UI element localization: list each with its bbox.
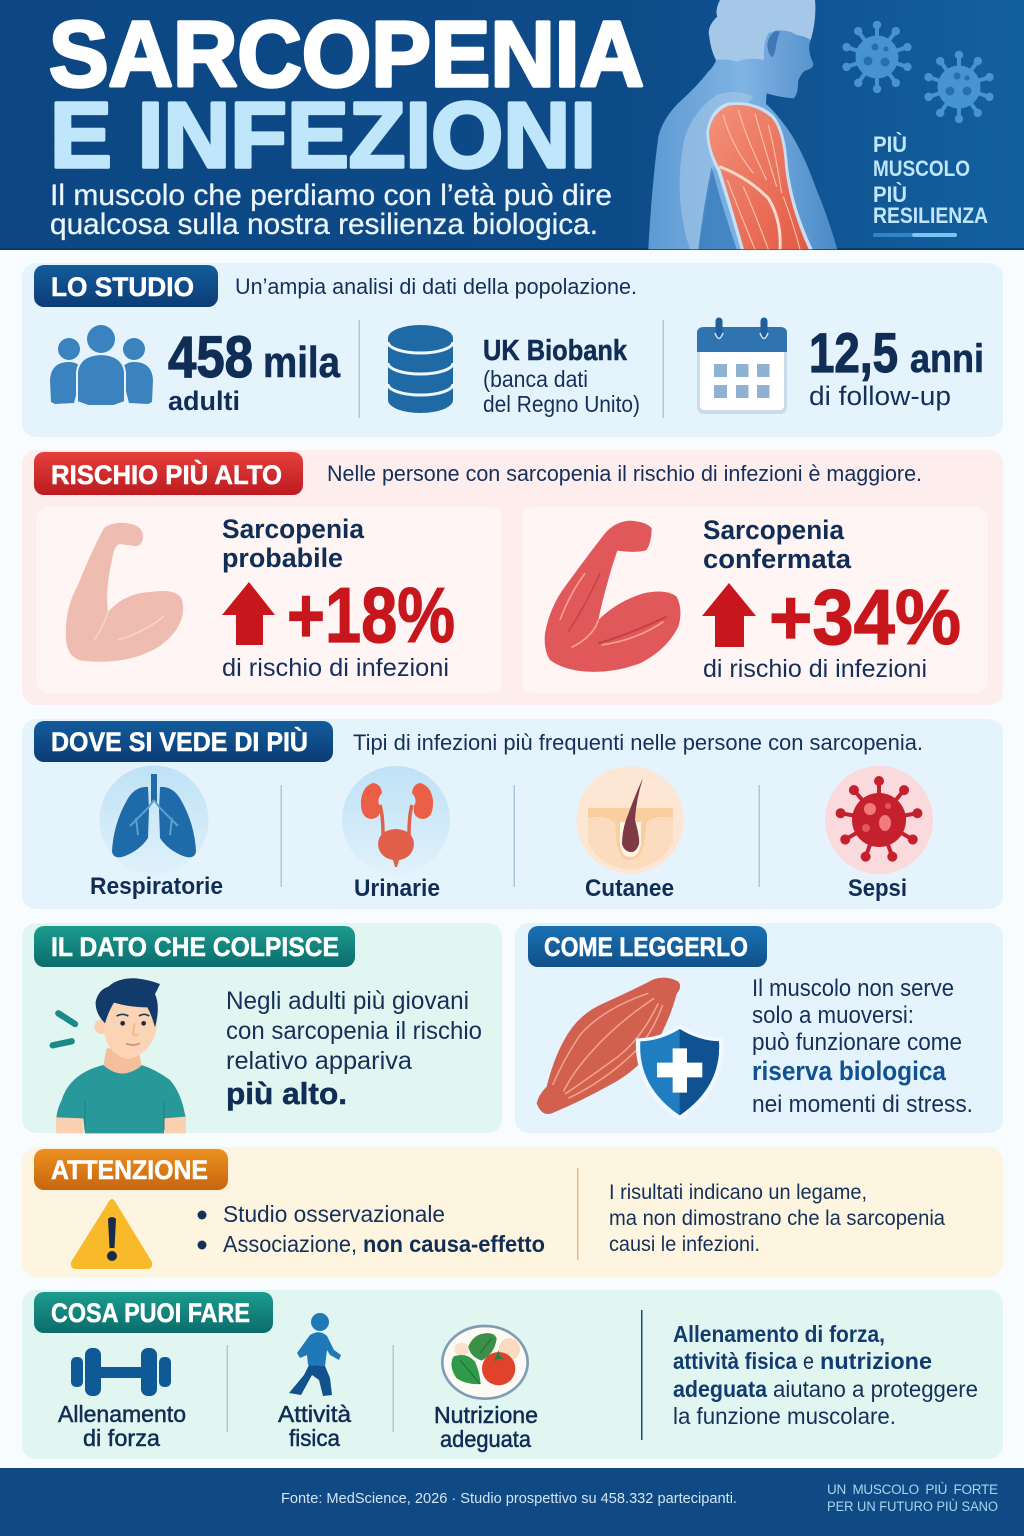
panel: il dato che colpisce xyxy=(22,923,502,1133)
icon: people xyxy=(50,325,153,406)
icon: up arrow xyxy=(702,583,756,647)
card title: Sarcopenia xyxy=(703,515,845,545)
explanation text: nei momenti di stress. xyxy=(752,1091,973,1118)
advice text: Allenamento di forza, xyxy=(673,1321,885,1347)
label: Nutrizione xyxy=(434,1402,538,1428)
stat: UK Biobank xyxy=(483,335,640,417)
heading: cosa puoi fare xyxy=(34,1292,273,1333)
panel: attenzione xyxy=(22,1147,1003,1277)
card title: confermata xyxy=(703,544,852,574)
value: +34%: +34% xyxy=(769,573,961,661)
card caption: di rischio di infezioni xyxy=(222,654,449,682)
bullet list: Associazione, xyxy=(223,1231,357,1257)
label xyxy=(278,1401,351,1451)
stat: 12,5 anni: 12,5 xyxy=(809,321,898,384)
icon: virus left xyxy=(841,21,913,93)
advice text: e xyxy=(803,1348,814,1374)
panel: dove si vede di più xyxy=(22,719,1003,909)
intro text: Tipi di infezioni più frequenti nelle persone con sarcopenia. xyxy=(353,730,923,755)
advice text: aiutano a proteggere xyxy=(773,1376,978,1402)
stat: 458 mila adulti: 458 xyxy=(168,325,253,390)
title: E INFEZIONI xyxy=(50,83,596,187)
advice text: la funzione muscolare. xyxy=(673,1403,896,1429)
statement text: più alto. xyxy=(226,1076,347,1111)
stat: UK Biobank: UK Biobank xyxy=(483,335,628,367)
icon: plate with vegetables xyxy=(442,1326,528,1399)
slogan: PIÙ xyxy=(873,132,907,157)
label xyxy=(434,1402,538,1452)
item: nutrizione adeguata xyxy=(434,1326,538,1452)
footer xyxy=(0,1468,1024,1536)
explanation text: riserva biologica xyxy=(752,1056,947,1086)
stat: UK Biobank: del Regno Unito) xyxy=(483,391,640,417)
panel: lo studio xyxy=(22,263,1003,437)
heading: dove si vede di più: DOVE SI VEDE DI PIÙ xyxy=(51,726,308,757)
statement text: con sarcopenia il rischio xyxy=(226,1017,482,1045)
panel: come leggerlo xyxy=(515,923,1003,1133)
icon: red virus xyxy=(835,776,923,863)
heading: il dato che colpisce xyxy=(34,926,355,967)
bullet list xyxy=(198,1201,545,1257)
subtitle: qualcosa sulla nostra resilienza biologica. xyxy=(50,208,598,241)
label: adeguata xyxy=(440,1426,531,1452)
title xyxy=(49,2,644,187)
heading: rischio più alto xyxy=(34,452,303,495)
icon: urinary tract xyxy=(361,783,433,867)
illustration: muscle with shield xyxy=(537,978,724,1120)
label: Respiratorie xyxy=(90,873,223,900)
label: Cutanee xyxy=(585,875,674,902)
heading: lo studio xyxy=(34,265,218,307)
value: +18%: +18% xyxy=(287,571,455,659)
label: Sepsi xyxy=(848,875,907,902)
stat: 12,5 anni: di follow-up xyxy=(809,381,951,411)
item: respiratorie xyxy=(90,766,223,900)
item: urinarie xyxy=(342,766,450,902)
card title: probabile xyxy=(222,543,343,573)
footer slogan xyxy=(827,1482,998,1514)
icon: database xyxy=(388,325,453,413)
item: cutanee xyxy=(576,766,684,902)
label xyxy=(58,1401,186,1451)
icon: virus right xyxy=(923,51,995,123)
header banner xyxy=(0,0,1024,250)
advice text: attività fisica xyxy=(673,1348,797,1374)
card: sarcopenia confermata xyxy=(522,507,988,693)
bullet list: Studio osservazionale xyxy=(223,1201,445,1227)
panel: rischio più alto xyxy=(22,450,1003,705)
stat: 458 mila adulti: mila xyxy=(263,338,340,387)
item: allenamento di forza xyxy=(58,1348,186,1451)
caveat text: I risultati indicano un legame, xyxy=(609,1181,867,1204)
stat: UK Biobank: (banca dati xyxy=(483,366,588,392)
heading: come leggerlo: COME LEGGERLO xyxy=(544,932,748,962)
title: SARCOPENIA xyxy=(49,2,644,106)
stat: 458 mila adulti: adulti xyxy=(168,386,240,416)
statement text: Negli adulti più giovani xyxy=(226,987,469,1015)
caveat text xyxy=(609,1181,945,1256)
icon: lungs xyxy=(112,774,196,857)
stat: 458 mila adulti xyxy=(168,325,340,416)
icon: warning triangle xyxy=(71,1199,152,1269)
caveat text: ma non dimostrano che la sarcopenia xyxy=(609,1207,945,1230)
source line: Fonte: MedScience, 2026 · Studio prospettivo su 458.332 partecipanti. xyxy=(281,1491,737,1507)
slogan xyxy=(873,132,988,237)
card title: Sarcopenia xyxy=(222,514,365,544)
label: Allenamento xyxy=(58,1401,186,1427)
bullet list: non causa-effetto xyxy=(363,1231,545,1257)
heading: rischio più alto: RISCHIO PIÙ ALTO xyxy=(51,459,282,490)
heading: come leggerlo xyxy=(528,926,767,967)
heading: dove si vede di più xyxy=(34,721,333,762)
explanation text: solo a muoversi: xyxy=(752,1002,914,1029)
label: fisica xyxy=(289,1425,340,1451)
label: di forza xyxy=(83,1425,160,1451)
statement text: relativo appariva xyxy=(226,1047,412,1075)
heading: attenzione xyxy=(34,1149,228,1190)
card caption: di rischio di infezioni xyxy=(703,655,927,683)
subtitle: Il muscolo che perdiamo con l’età può dire xyxy=(50,179,612,212)
icon: up arrow xyxy=(222,582,275,645)
stat: 12,5 anni xyxy=(809,321,984,411)
statement text xyxy=(226,987,482,1111)
icon: muscular arm xyxy=(545,521,680,672)
item: attività fisica xyxy=(278,1313,351,1451)
footer slogan: UN MUSCOLO PIÙ FORTE xyxy=(827,1482,998,1497)
slogan: RESILIENZA xyxy=(873,203,988,228)
panel: cosa puoi fare xyxy=(22,1290,1003,1459)
icon: slim arm xyxy=(66,523,183,662)
card: sarcopenia probabile xyxy=(36,507,502,693)
icon: dumbbell xyxy=(71,1348,171,1396)
subtitle xyxy=(50,179,612,241)
slogan: PIÙ xyxy=(873,182,907,207)
advice text: nutrizione xyxy=(820,1348,932,1374)
stat: 12,5 anni: anni xyxy=(910,337,984,381)
heading: attenzione: ATTENZIONE xyxy=(51,1155,208,1185)
icon: skin with hair xyxy=(588,778,673,870)
intro text: Un’ampia analisi di dati della popolazione. xyxy=(235,274,637,299)
heading: cosa puoi fare: COSA PUOI FARE xyxy=(51,1298,250,1328)
illustration: human figure with arm muscle xyxy=(648,0,837,249)
explanation text: può funzionare come xyxy=(752,1029,962,1056)
icon: walking person xyxy=(289,1313,341,1396)
card title xyxy=(703,515,852,574)
footer slogan: PER UN FUTURO PIÙ SANO xyxy=(827,1499,998,1514)
slogan: MUSCOLO xyxy=(873,156,970,181)
item: sepsi xyxy=(825,766,933,902)
heading: lo studio: LO STUDIO xyxy=(51,272,194,302)
card title xyxy=(222,514,365,573)
explanation text xyxy=(752,975,973,1118)
advice text xyxy=(673,1321,978,1429)
heading: il dato che colpisce: IL DATO CHE COLPISCE xyxy=(51,932,339,962)
advice text: adeguata xyxy=(673,1376,767,1402)
label: Urinarie xyxy=(354,875,440,902)
explanation text: Il muscolo non serve xyxy=(752,975,954,1002)
label: Attività xyxy=(278,1401,351,1427)
caveat text: causi le infezioni. xyxy=(609,1233,760,1256)
intro text: Nelle persone con sarcopenia il rischio di infezioni è maggiore. xyxy=(327,461,922,486)
icon: calendar xyxy=(697,321,787,414)
illustration: young man xyxy=(53,978,186,1133)
